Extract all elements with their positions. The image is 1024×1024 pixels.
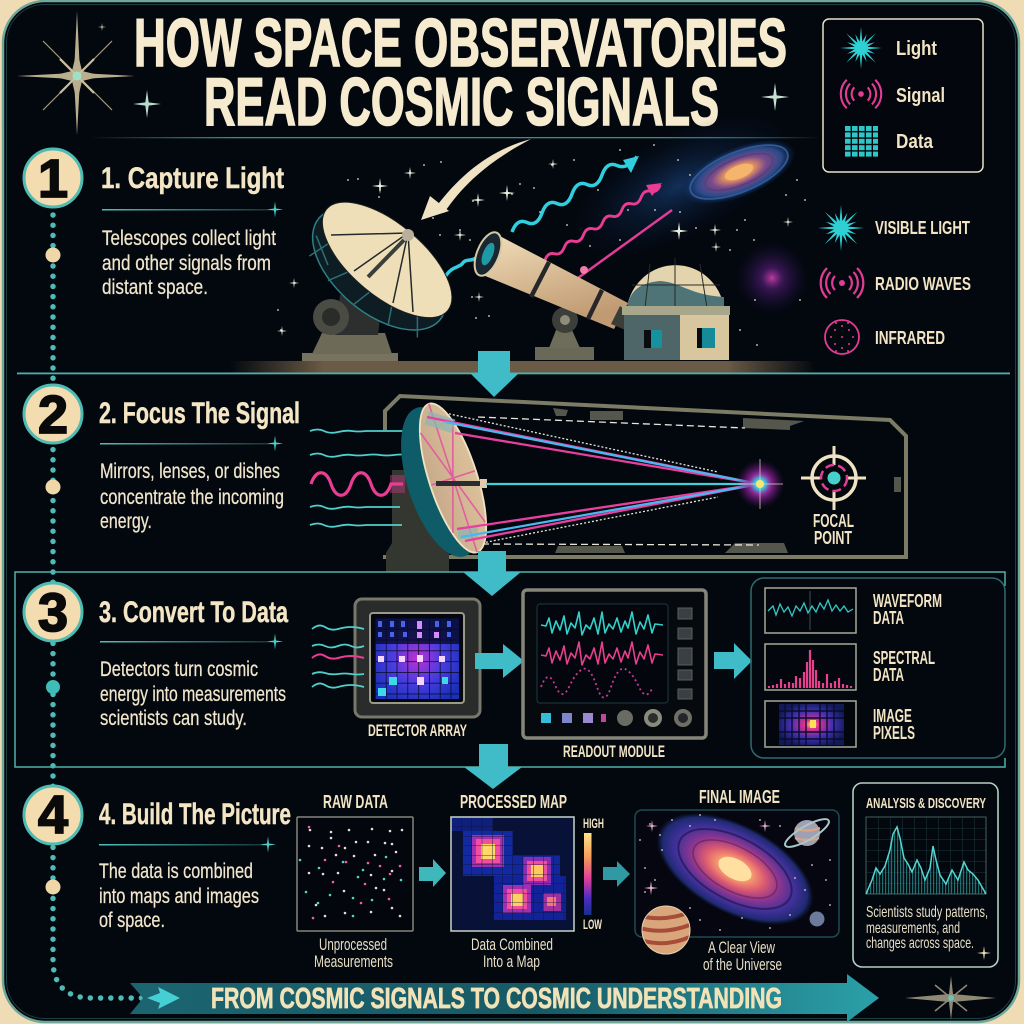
planet jupiter <box>642 906 690 954</box>
step 3 <box>24 583 288 730</box>
step 3 text: scientists can study. <box>100 707 247 730</box>
processed map panel: HIGH <box>583 815 604 831</box>
step 2 number badge: 2 <box>38 385 68 445</box>
enclosure <box>383 396 906 557</box>
step 4 text: of space. <box>99 909 165 932</box>
focal point label: FOCAL <box>813 511 854 531</box>
infrared item: INFRARED <box>875 328 945 348</box>
step 3 text <box>100 658 286 730</box>
step 4 heading: 4. Build The Picture <box>99 798 291 831</box>
radio dish <box>291 182 471 361</box>
step 3 text: energy into measurements <box>100 683 286 706</box>
step 2 number badge <box>24 385 82 445</box>
heat blobs <box>472 835 561 913</box>
readout controls <box>541 608 692 727</box>
star field <box>278 145 805 345</box>
visible light item <box>818 205 970 251</box>
legend item: data <box>845 126 934 157</box>
raw data panel: Measurements <box>314 952 393 971</box>
legend item: signal: Signal <box>896 85 945 107</box>
radio waves item <box>821 268 971 298</box>
icon: large decorative star <box>17 11 789 135</box>
enclosure fixtures <box>553 408 901 553</box>
step 3 heading: 3. Convert To Data <box>99 596 288 629</box>
feed rod <box>436 479 487 488</box>
step 2 heading: 2. Focus The Signal <box>99 397 300 430</box>
observatory dome <box>622 258 730 360</box>
image pixels <box>765 701 915 747</box>
infrared item <box>825 320 945 354</box>
legend item: light: Light <box>896 38 937 60</box>
focused rays <box>427 417 759 541</box>
parabolic dish <box>385 396 500 566</box>
arrow: step 1 to step 2 <box>470 351 519 397</box>
raw data panel <box>297 792 413 971</box>
step 4 number badge: 4 <box>38 785 68 845</box>
icon: banner start arrow <box>147 987 180 1009</box>
step 3 number badge: 3 <box>38 583 68 643</box>
step 1 text: and other signals from <box>102 252 271 275</box>
readout module <box>523 590 706 738</box>
step 2 text: energy. <box>100 510 152 533</box>
detector array <box>312 599 480 717</box>
waveform data <box>765 588 942 633</box>
radio wave <box>545 185 660 260</box>
bottom banner arrow: FROM COSMIC SIGNALS TO COSMIC UNDERSTANDING <box>211 983 782 1015</box>
raw data panel: Unprocessed <box>319 935 387 954</box>
incoming signals <box>310 430 406 527</box>
ground <box>230 361 815 373</box>
image pixels: PIXELS <box>873 723 915 743</box>
arrow: step 3 to step 4 <box>464 744 522 789</box>
step 3 outline <box>15 572 1005 767</box>
step 2 text: Mirrors, lenses, or dishes <box>100 460 280 483</box>
legend box <box>823 19 983 172</box>
final image panel: A Clear View <box>708 938 775 957</box>
step 4 <box>24 785 291 932</box>
panel: data outputs <box>751 578 1005 758</box>
step 4 text: into maps and images <box>99 885 259 908</box>
spectral data: SPECTRAL <box>873 648 935 668</box>
processed map panel: Data Combined <box>471 935 553 954</box>
focal glow <box>736 459 784 509</box>
arrow: detector to readout <box>475 644 524 678</box>
illustration: observatories capturing light <box>230 84 815 373</box>
diagram: focusing dish <box>310 396 906 572</box>
title: READ COSMIC SIGNALS <box>204 64 719 140</box>
arrow: readout to outputs <box>714 643 752 679</box>
legend item: data: Data <box>896 131 934 153</box>
dotted progress timeline <box>46 215 146 998</box>
step 2 text: concentrate the incoming <box>100 486 284 509</box>
processed map panel <box>451 792 604 971</box>
step 1 heading: 1. Capture Light <box>101 162 284 195</box>
step 1 text: Telescopes collect light <box>102 227 276 250</box>
step 4 text: The data is combined <box>99 860 253 883</box>
waveform data: WAVEFORM <box>873 591 942 611</box>
visible light item: VISIBLE LIGHT <box>875 218 970 238</box>
step 1 text: distant space. <box>102 276 208 299</box>
legend item: light <box>840 27 937 69</box>
planet saturn <box>782 814 832 852</box>
step 4 number badge <box>24 785 82 845</box>
image pixels: IMAGE <box>873 706 912 726</box>
focal point label: POINT <box>814 528 852 548</box>
focal point label <box>813 511 854 548</box>
panel: analysis and discovery <box>853 783 998 967</box>
light wave <box>445 156 637 277</box>
processed map panel: PROCESSED MAP <box>460 792 567 812</box>
arrow: step 2 to step 3 <box>463 551 521 596</box>
title <box>134 5 787 140</box>
final image panel: FINAL IMAGE <box>699 787 780 807</box>
spectral data <box>765 644 935 690</box>
arrow: raw to map <box>419 859 446 887</box>
step 3 number badge <box>24 583 82 643</box>
waveform data: DATA <box>873 608 904 628</box>
analysis chart <box>866 817 986 894</box>
step 1 <box>24 149 284 299</box>
final image panel <box>635 787 839 974</box>
step 4 text <box>99 860 259 932</box>
final image panel: of the Universe <box>703 955 782 974</box>
step 2 text <box>100 460 284 533</box>
step 1 number badge: 1 <box>38 149 68 209</box>
bottom banner arrow <box>130 974 879 1022</box>
spiral galaxy <box>638 790 832 948</box>
step 1 number badge <box>24 149 82 209</box>
step 3 text: Detectors turn cosmic <box>100 658 258 681</box>
radio waves item: RADIO WAVES <box>875 274 971 294</box>
legend item: signal <box>841 80 945 108</box>
spectral data: DATA <box>873 665 904 685</box>
readout module label: READOUT MODULE <box>563 742 665 761</box>
arrow: map to final image <box>603 861 630 887</box>
dashed guide lines <box>445 413 759 545</box>
wavelength list <box>818 205 971 354</box>
raw data panel: RAW DATA <box>323 792 388 812</box>
infrared beam <box>578 210 672 278</box>
icon: bottom right star <box>905 976 996 1020</box>
processed map panel: LOW <box>583 916 602 932</box>
readout waveforms <box>541 612 663 698</box>
telescope <box>469 229 646 360</box>
detector input signals <box>312 625 364 688</box>
curved arrow into dish <box>421 139 531 220</box>
antenna mount <box>386 470 449 572</box>
step 1 text <box>102 227 276 299</box>
panel: analysis and discovery: measurements, and <box>866 920 960 937</box>
step 2 <box>24 385 300 533</box>
processed map panel: Into a Map <box>483 952 540 971</box>
focal target <box>801 446 866 510</box>
small moon <box>810 912 824 926</box>
galaxy <box>674 126 804 218</box>
detector array label: DETECTOR ARRAY <box>368 721 467 740</box>
